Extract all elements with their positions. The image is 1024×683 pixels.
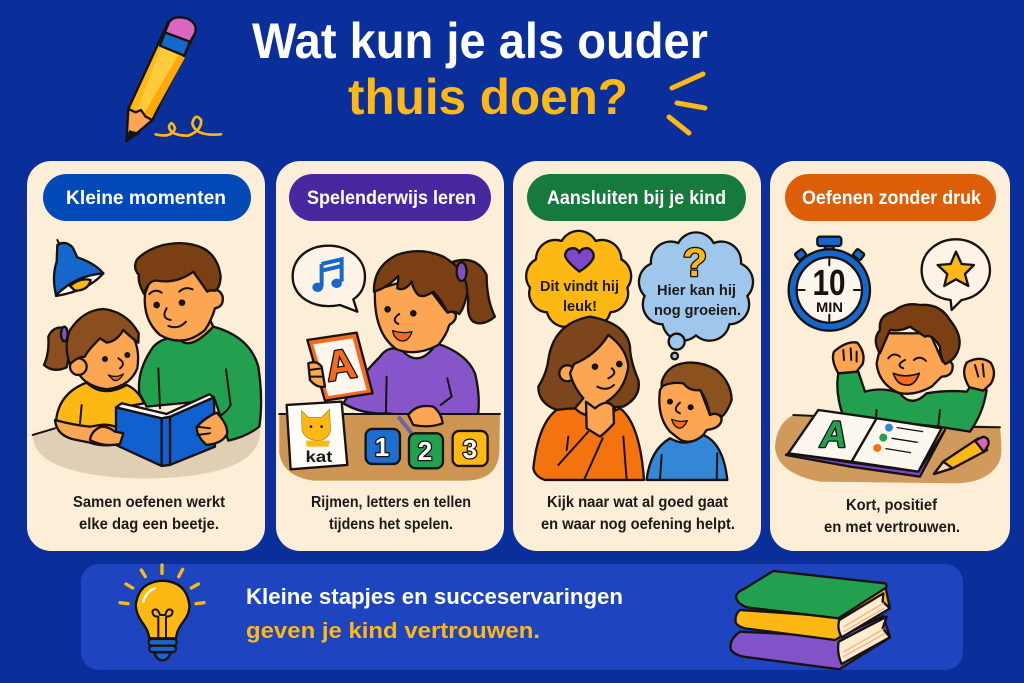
illustration: girl with letter card and number blocks xyxy=(279,246,500,481)
caption xyxy=(73,494,226,533)
word on cat card: kat xyxy=(306,449,333,466)
illustration: mother, boy and thought clouds xyxy=(526,231,753,480)
banner message: geven je kind vertrouwen. xyxy=(246,618,540,643)
title: thuis doen? xyxy=(348,69,628,125)
cloud text: growth: nog groeien. xyxy=(654,302,741,319)
banner message: Kleine stapjes en succeservaringen xyxy=(246,584,623,609)
icon: stack of books xyxy=(731,571,890,669)
caption: Kijk naar wat al goed gaat xyxy=(547,494,729,511)
illustration: stopwatch and cheering boy xyxy=(775,237,1001,483)
caption: tijdens het spelen. xyxy=(329,516,453,533)
caption: Samen oefenen werkt xyxy=(73,494,226,511)
panel: Spelenderwijs leren xyxy=(276,161,504,551)
question mark: ? xyxy=(683,241,707,285)
panel: Kleine momenten xyxy=(27,161,265,551)
cloud text: likes xyxy=(540,278,619,315)
cloud text: likes: Dit vindt hij xyxy=(540,278,619,295)
cloud text: growth: Hier kan hij xyxy=(657,282,736,299)
title xyxy=(252,13,708,125)
title: Wat kun je als ouder xyxy=(252,13,708,69)
caption xyxy=(311,494,471,533)
number blocks: 2 xyxy=(418,436,432,466)
cloud text: likes: leuk! xyxy=(563,298,597,315)
panel: Aansluiten bij je kind xyxy=(513,161,761,551)
caption: en met vertrouwen. xyxy=(824,519,960,536)
illustration: father and daughter reading xyxy=(33,240,261,479)
icon: amber sparkle rays xyxy=(669,74,705,133)
caption: Rijmen, letters en tellen xyxy=(311,494,471,511)
heading pill: Aansluiten bij je kind xyxy=(547,187,726,209)
panel: Oefenen zonder druk xyxy=(770,161,1010,551)
heading pill xyxy=(289,174,491,221)
timer number: 10 xyxy=(812,262,846,303)
caption xyxy=(541,494,735,533)
caption: elke dag een beetje. xyxy=(79,516,219,533)
banner message xyxy=(246,584,623,643)
heading pill xyxy=(785,174,996,221)
heading pill xyxy=(527,174,746,221)
icon: pencil with squiggle xyxy=(126,17,221,141)
letter A on card: A xyxy=(322,339,359,390)
panel: bottom banner xyxy=(81,564,963,670)
number blocks: 3 xyxy=(463,434,477,464)
heading pill xyxy=(43,174,251,221)
icon: light bulb xyxy=(120,565,204,660)
cloud text: growth xyxy=(654,282,741,319)
caption xyxy=(824,497,960,536)
heading pill: Spelenderwijs leren xyxy=(307,187,476,209)
letter A in book: A xyxy=(817,413,851,455)
heading pill: Oefenen zonder druk xyxy=(802,187,981,209)
number blocks xyxy=(375,432,477,466)
caption: Kort, positief xyxy=(846,497,938,514)
timer unit: MIN xyxy=(816,300,843,315)
caption: en waar nog oefening helpt. xyxy=(541,516,735,533)
number blocks: 1 xyxy=(375,432,389,462)
heading pill: Kleine momenten xyxy=(66,187,226,209)
